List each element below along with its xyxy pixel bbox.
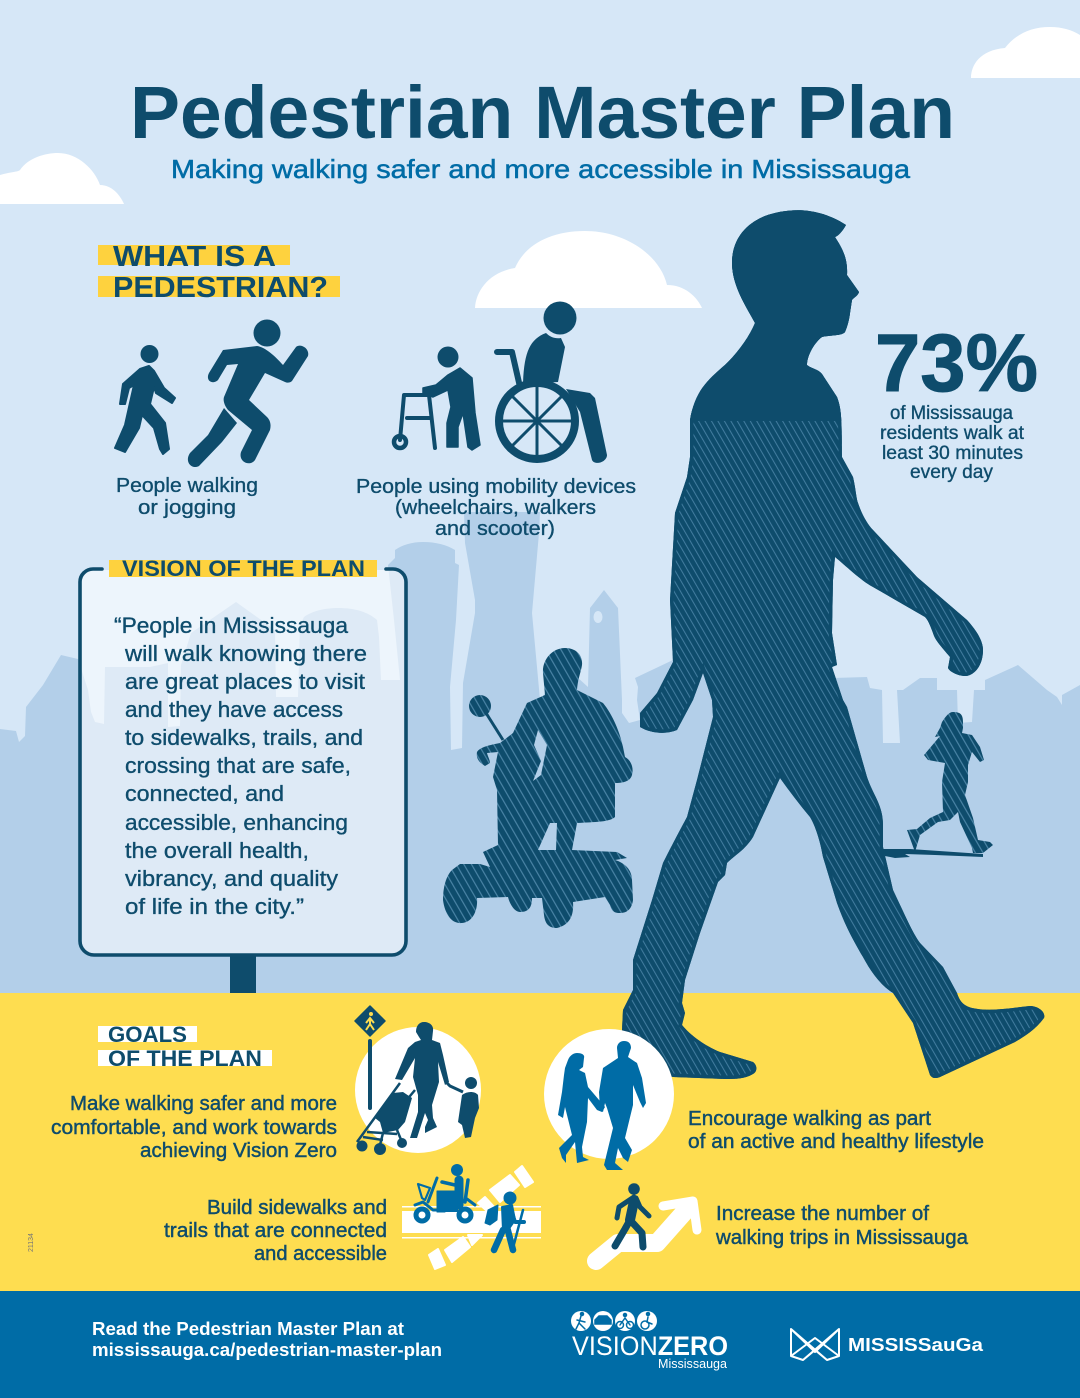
scooter rider icon [415,1164,475,1221]
icon: person using a wheelchair [497,302,607,463]
statistic caption: least 30 minutes [882,442,1023,464]
vision quote: “People in Mississauga [114,613,348,638]
caption: mobility devices: and scooter) [435,517,555,540]
goal text: more walking trips: Increase the number of [716,1202,929,1225]
sign post [230,955,256,993]
silhouette: large walking man with 73% shaded [622,210,1044,1079]
footer call to action [92,1318,442,1360]
sign heading: VISION OF THE PLAN [122,556,365,581]
footer call to action: mississauga.ca/pedestrian-master-plan [92,1339,442,1360]
hiker icon [485,1192,524,1250]
vision quote: crossing that are safe, [125,753,351,778]
subtitle: Making walking safer and more accessible in Mississauga [171,154,911,184]
pedestrian crossing sign [355,1006,385,1110]
logo: Vision Zero Mississauga [571,1311,728,1371]
sign panel [80,570,406,955]
vision quote: of life in the city.” [125,894,304,919]
vision quote: to sidewalks, trails, and [125,725,363,750]
caption: people walking or jogging [116,474,258,519]
heading: what is a pedestrian: PEDESTRIAN? [113,272,328,304]
jogger figure [907,712,993,853]
vision quote: the overall health, [125,838,309,863]
statistic caption: of Mississauga [890,402,1013,424]
icon: couple walking [544,1029,674,1170]
title: Pedestrian Master Plan [130,71,955,154]
icon: person walking [115,345,175,454]
sign border [80,569,406,955]
stroller [356,1083,415,1155]
wordmark: MISSISSauGa [848,1334,984,1355]
scooter mirror [469,695,491,717]
icon: person using a walker [394,346,480,450]
scooter steering stick [486,713,503,740]
jogger shadow [880,849,983,858]
caption: people walking or jogging: or jogging [138,496,236,519]
statistic caption: residents walk at [880,422,1025,444]
goal text: safer walking [51,1092,337,1162]
arrow [596,1201,697,1261]
cloud left [0,153,124,204]
logo: City of Mississauga [791,1329,984,1360]
trail blocks [429,1166,533,1269]
yellow ground [0,993,1080,1291]
goal text: active lifestyle: of an active and healthy lifestyle [688,1130,984,1153]
vision quote: will walk knowing there [124,641,367,666]
goal text: sidewalks and trails: and accessible [254,1242,387,1265]
vision quote: and they have access [125,697,343,722]
goal text: safer walking: achieving Vision Zero [140,1139,337,1162]
icon: family with stroller and crossing sign [355,1006,481,1155]
statistic: 73%: 73% [875,318,1038,409]
silhouette: jogger [880,712,993,858]
caption: mobility devices: (wheelchairs, walkers [395,496,596,519]
city skyline [0,512,1080,993]
M mark [791,1329,839,1360]
caption: mobility devices [356,475,636,540]
walker [615,1183,649,1247]
heading: goals of the plan [98,1022,272,1071]
sidewalk band [402,1206,541,1238]
goal text: sidewalks and trails: trails that are connected [164,1219,387,1242]
goal text: more walking trips: walking trips in Mississauga [715,1226,969,1249]
statistic caption [880,402,1025,483]
caption: mobility devices: People using mobility devices [356,475,636,498]
man of couple [599,1041,646,1170]
vision sign [80,556,406,993]
footer call to action: Read the Pedestrian Master Plan at [92,1318,404,1339]
goal text: safer walking: Make walking safer and more [70,1092,337,1115]
goal text: sidewalks and trails [164,1196,387,1265]
mother [395,1022,449,1138]
wordmark: VISIONZERO [572,1331,728,1361]
icon: upward arrow with walker [596,1183,697,1261]
goal text: sidewalks and trails: Build sidewalks and [207,1196,387,1219]
footer band [0,1291,1080,1398]
child [447,1077,479,1138]
road user icons [571,1311,657,1331]
goal text: active lifestyle: Encourage walking as part [688,1107,931,1130]
print code: 21134 [28,1233,35,1252]
cloud centre [475,231,702,308]
goal text: more walking trips [715,1202,969,1249]
statistic caption: every day [910,461,993,483]
cloud top right [971,27,1080,78]
vision quote: connected, and [125,781,284,806]
heading: goals of the plan: GOALS [108,1022,187,1047]
vision quote: are great places to visit [125,669,366,694]
goal text: active lifestyle [688,1107,984,1153]
logo: Vision Zero Mississauga: Mississauga [658,1356,728,1371]
goal text: safer walking: comfortable, and work towards [51,1116,337,1139]
heading: what is a pedestrian [98,241,340,304]
vision quote [114,613,367,919]
icon: sidewalk and trail crossing [402,1164,541,1269]
icon: person jogging [188,320,308,467]
clock face [594,611,602,623]
silhouette: person on mobility scooter [443,648,633,928]
heading: what is a pedestrian: WHAT IS A [113,241,276,273]
vision quote: accessible, enhancing [125,810,348,835]
heading: goals of the plan: OF THE PLAN [108,1046,262,1071]
vision quote: vibrancy, and quality [125,866,339,891]
woman of couple [558,1053,605,1163]
caption: people walking or jogging: People walking [116,474,258,497]
